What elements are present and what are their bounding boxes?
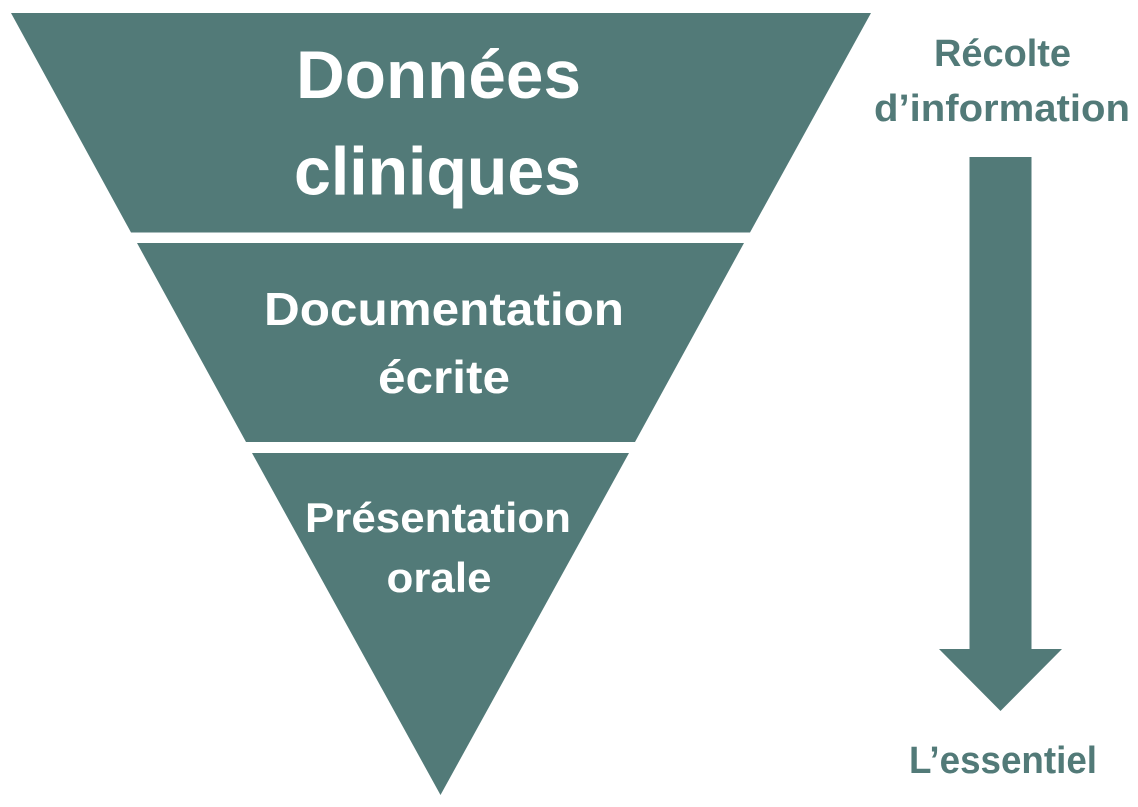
pyramid tier: Documentation écrite: écrite <box>378 351 510 403</box>
pyramid tier: Documentation écrite: Documentation <box>264 283 624 335</box>
label: L'essentiel: L’essentiel <box>909 740 1097 782</box>
pyramid tier: Présentation orale: Présentation <box>305 494 571 541</box>
label: Récolte d'information <box>874 33 1130 130</box>
pyramid tier: Présentation orale: orale <box>386 554 492 601</box>
arrow: downward <box>939 157 1062 711</box>
pyramid tier: Présentation orale <box>252 453 629 795</box>
pyramid tier: Documentation écrite <box>137 243 744 442</box>
label: Récolte d'information: Récolte <box>934 33 1071 75</box>
label: Récolte d'information: d’information <box>874 88 1130 130</box>
pyramid tier: Données cliniques: cliniques <box>294 134 581 210</box>
pyramid tier: Données cliniques: Données <box>296 37 581 113</box>
pyramid tier: Données cliniques <box>11 13 871 232</box>
